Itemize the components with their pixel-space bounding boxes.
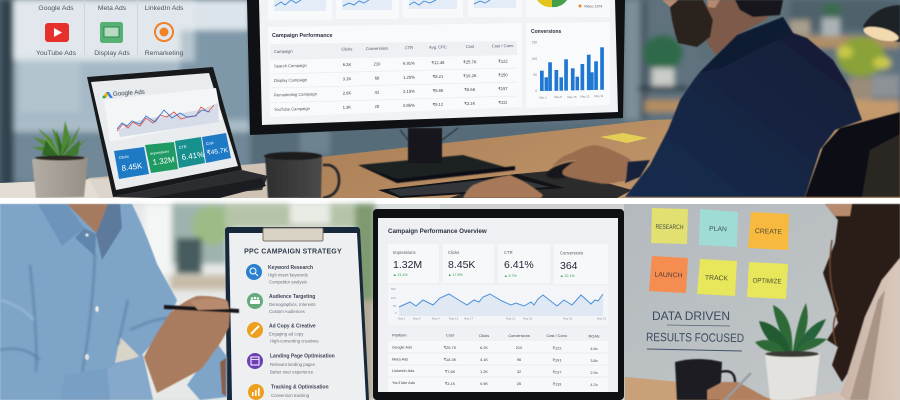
platform table: ROAS	[588, 334, 600, 338]
handwritten wall slogan: RESULTS FOCUSED	[646, 330, 744, 345]
office chair	[805, 112, 900, 197]
item: tracking and optimisation	[248, 384, 329, 400]
platform table: ₹3.1K	[445, 381, 456, 386]
note: create: CREATE	[755, 228, 783, 236]
table rows: 42	[375, 90, 380, 95]
item: ad copy and creative: Ad Copy & Creative	[269, 324, 316, 330]
note: plan: PLAN	[709, 226, 727, 233]
keyboard	[378, 174, 565, 198]
laptop with Google Ads dashboard	[87, 67, 268, 198]
frosted platform labels panel	[15, 0, 195, 62]
top KPI cards	[268, 0, 522, 20]
overview line chart: 100	[391, 296, 396, 300]
table rows: ₹111	[498, 100, 508, 105]
background plants and shelf right	[624, 0, 900, 125]
hand holding pen	[707, 373, 772, 400]
KPI: impressions: 1.32M	[393, 259, 422, 271]
handwritten wall slogan	[646, 309, 744, 351]
table rows: ₹25.7K	[463, 59, 477, 65]
platform names row two: Remarketing	[145, 50, 183, 57]
sticky note on desk	[600, 133, 648, 143]
platform table: ₹18.3K	[444, 357, 457, 362]
table rows: Display Campaign	[274, 77, 308, 83]
KPI: clicks: 8.45K	[448, 259, 475, 271]
item: ad copy and creative: High-converting creatives	[270, 338, 318, 344]
platform table: ₹237	[553, 370, 561, 374]
platform table	[388, 329, 608, 392]
metric tile text: ₹45.7K	[206, 146, 229, 157]
platform table: Clicks	[479, 333, 489, 338]
platform table: Cost	[446, 332, 455, 338]
platform table: 3.8x	[590, 358, 598, 363]
platform table: 96	[517, 357, 521, 362]
computer mouse	[545, 158, 589, 182]
platform table: Platform	[392, 332, 406, 338]
table rows: Cost	[466, 44, 475, 49]
KPI: conversions: 364	[560, 260, 578, 272]
table rows: 1.3K	[343, 105, 351, 110]
overview line chart: May 5	[413, 316, 421, 320]
platform names row one: LinkedIn Ads	[145, 5, 184, 12]
table rows: 210	[373, 61, 381, 66]
item: landing page optimisation: Better user experience	[270, 370, 314, 374]
KPI: conversions: Conversions	[560, 250, 583, 256]
table rows: Search Campaign	[274, 63, 308, 68]
Google Ads logo and name: Google Ads	[113, 89, 145, 98]
black mug	[675, 359, 735, 400]
metric tile text: Clicks	[119, 155, 129, 160]
metric tile text: Cost	[206, 141, 215, 146]
table rows: YouTube Campaign	[274, 106, 311, 112]
platform table: Google Ads	[392, 344, 412, 350]
overview line chart: May 21	[506, 316, 516, 320]
lower monitor with campaign overview	[373, 204, 624, 400]
handwritten wall slogan: DATA DRIVEN	[652, 309, 730, 323]
KPI: CTR: 6.41%	[504, 259, 534, 271]
KPI: impressions: Impressions	[393, 250, 416, 255]
table rows: ₹6.6K	[464, 87, 476, 92]
platform names row two	[36, 50, 183, 57]
table rows: CTR	[405, 45, 413, 50]
metric tile text: CTR	[179, 145, 187, 150]
platform names row two: YouTube Ads	[36, 50, 77, 57]
note: launch: LAUNCH	[654, 272, 683, 280]
table rows: 28	[375, 104, 380, 109]
table rows: Campaign	[274, 49, 293, 54]
overview line chart: May 17	[464, 316, 474, 320]
overview title: Campaign Performance Overview	[388, 228, 487, 235]
table rows: Cost / Conv.	[492, 43, 514, 48]
platform table: 210	[516, 345, 523, 350]
platform table: 1.2K	[480, 369, 488, 374]
item: audience targeting: Custom Audiences	[269, 309, 305, 314]
overview line chart: May 9	[432, 316, 440, 320]
metric tile text: Impressions	[150, 149, 170, 156]
panel: bottom scene, strategy review	[0, 204, 900, 400]
man in blue shirt	[0, 204, 177, 400]
platform table: 4.2x	[590, 382, 598, 387]
KPI: impressions	[388, 244, 439, 283]
table rows	[274, 43, 514, 112]
platform names row two: Display Ads	[94, 50, 130, 57]
woman with long hair and beige blazer	[790, 204, 900, 400]
blurred background office	[130, 204, 375, 400]
icon: YouTube Ads	[45, 23, 69, 42]
potted plant	[32, 121, 89, 198]
date labels: May 8	[554, 95, 562, 99]
wooden table	[625, 377, 780, 400]
gap between arm and torso	[115, 337, 140, 363]
pie chart card	[526, 0, 610, 17]
right wall background	[624, 204, 900, 400]
item: audience targeting	[247, 293, 316, 314]
icon: desk lamp	[862, 5, 900, 44]
item: keyword research: Keyword Research	[268, 265, 313, 271]
KPI: CTR: CTR	[504, 250, 513, 255]
item: keyword research: High intent keywords	[268, 272, 308, 278]
axis labels: 150	[532, 40, 537, 44]
table rows: ₹10.2K	[463, 73, 477, 78]
overview line chart: May 1	[398, 316, 406, 320]
item: landing page optimisation: Relevant landing pages	[270, 362, 315, 367]
KPI: CTR	[498, 244, 550, 283]
item: audience targeting: Audience Targeting	[269, 294, 315, 300]
forearm sleeve and hand holding pen over clipboard	[144, 296, 239, 400]
table rows: 0.95%	[403, 103, 415, 108]
table rows: ₹6.65	[433, 88, 444, 93]
campaign performance table card	[268, 23, 522, 117]
axis labels	[532, 40, 537, 93]
item: tracking and optimisation: Conversion tracking	[271, 393, 310, 398]
axis labels: 100	[532, 57, 537, 61]
icon: Remarketing	[155, 23, 173, 41]
mouse pad	[450, 170, 632, 198]
office window background	[0, 0, 650, 190]
platform table: 4.1K	[480, 357, 488, 362]
hand on keyboard	[463, 175, 543, 198]
item: landing page optimisation: Landing Page Optimisation	[270, 354, 335, 360]
white divider between scenes	[0, 198, 900, 204]
hand on mouse	[552, 145, 631, 184]
panel: top scene, desk with dashboards	[0, 0, 900, 198]
overview line chart: 50	[393, 304, 397, 308]
note: optimize: OPTIMIZE	[752, 277, 782, 286]
platform table: ₹7.6K	[445, 369, 456, 374]
table rows: Clicks	[341, 46, 352, 52]
table title: Campaign Performance	[272, 33, 333, 39]
item: ad copy and creative	[247, 322, 318, 344]
chart title: Conversions	[531, 29, 562, 35]
table rows: ₹157	[498, 86, 508, 91]
wooden desk	[0, 112, 900, 198]
monitor stand	[358, 128, 515, 183]
KPI: clicks: ▲ 17.8%	[448, 273, 464, 277]
right potted plant	[755, 303, 827, 400]
date labels: May 15	[567, 95, 577, 99]
note: research: RESEARCH	[655, 224, 684, 231]
icon: Display Ads	[100, 22, 123, 43]
platform table: 32	[517, 369, 521, 374]
overview line chart: 0	[395, 311, 397, 315]
platform table: 0.9K	[480, 381, 488, 386]
table rows: ₹8.21	[433, 74, 444, 79]
overview line chart: 500	[391, 287, 396, 291]
overview line chart: May 31	[597, 316, 607, 320]
table rows: Avg. CPC	[429, 44, 447, 50]
conversions bar chart card	[526, 22, 610, 108]
date labels: May 22	[580, 94, 590, 98]
table rows: 2.15%	[403, 89, 415, 94]
overview line chart	[388, 285, 608, 325]
note: track: TRACK	[705, 275, 729, 282]
table rows: 6.91%	[403, 61, 415, 66]
metric tile text: 6.41%	[181, 150, 205, 162]
overview line chart: May 29	[563, 316, 573, 320]
table rows: ₹150	[498, 72, 508, 78]
clipboard title: PPC CAMPAIGN STRATEGY	[244, 248, 342, 256]
platform names row one: Google Ads	[38, 5, 74, 12]
table rows: Conversions	[365, 46, 388, 51]
axis labels: 0	[535, 89, 537, 93]
table rows: 6.2K	[343, 62, 351, 67]
KPI: CTR: ▲ 5.7%	[504, 274, 518, 278]
platform table: ₹191	[553, 358, 561, 362]
platform table: 2.9x	[590, 370, 598, 375]
metric tiles	[114, 147, 149, 179]
KPI: conversions: ▲ 22.1%	[560, 274, 576, 278]
platform table: Cost / Conv.	[546, 333, 568, 338]
platform table: 4.6x	[590, 346, 598, 351]
metric tile text: 1.32M	[152, 155, 176, 167]
metal clip	[263, 228, 323, 241]
platform table: LinkedIn Ads	[392, 368, 414, 373]
date labels: May 31	[594, 94, 604, 98]
overview line chart: May 25	[523, 316, 533, 320]
metric tile text	[119, 141, 229, 173]
item: tracking and optimisation: Tracking & Optimisation	[271, 384, 329, 390]
metric tile text: 8.45K	[121, 161, 144, 173]
platform table: ₹122	[553, 346, 561, 350]
platform table: Meta Ads	[392, 356, 408, 362]
sticky notes wall	[649, 208, 789, 299]
item: keyword research: Competitor analysis	[269, 280, 307, 284]
date labels	[539, 94, 604, 100]
table rows: Remarketing Campaign	[274, 91, 318, 97]
clipboard: PPC campaign strategy	[225, 227, 369, 400]
laptop chart	[104, 88, 222, 142]
platform names row one: Meta Ads	[98, 5, 127, 12]
bars	[540, 47, 604, 91]
table rows: 1.25%	[403, 75, 415, 80]
item: ad copy and creative: Engaging ad copy	[269, 332, 304, 336]
table rows: ₹12.45	[431, 60, 445, 65]
KPI: clicks	[443, 244, 494, 283]
main monitor	[247, 0, 625, 183]
date labels: May 1	[539, 96, 547, 100]
table rows: 3.1K	[343, 76, 351, 81]
table rows: ₹122	[498, 59, 508, 64]
platform table: YouTube Ads	[392, 380, 415, 385]
platform table: 26	[517, 381, 521, 386]
item: audience targeting: Demographics, Interests	[269, 302, 316, 307]
platform table: ₹119	[553, 382, 561, 386]
platform names row one	[38, 5, 184, 12]
seated man in navy shirt	[620, 0, 862, 197]
item: keyword research	[246, 264, 313, 284]
table rows: ₹3.1K	[464, 101, 476, 106]
platform table: ₹25.7K	[444, 345, 457, 350]
coffee mug	[264, 152, 339, 198]
item: landing page optimisation	[247, 353, 335, 374]
table rows: 2.0K	[343, 90, 351, 96]
KPI: conversions	[554, 244, 608, 284]
table rows: ₹9.12	[433, 102, 444, 107]
overview line chart: May 13	[449, 316, 459, 320]
platform table: 6.2K	[480, 345, 488, 350]
KPI: clicks: Clicks	[448, 250, 459, 255]
axis labels: 50	[533, 73, 537, 77]
platform table: Conversions	[508, 333, 530, 338]
table rows: 68	[375, 75, 380, 81]
pie chart card: Video 10%	[584, 4, 603, 8]
KPI: impressions: ▲ 21.4%	[393, 273, 409, 277]
